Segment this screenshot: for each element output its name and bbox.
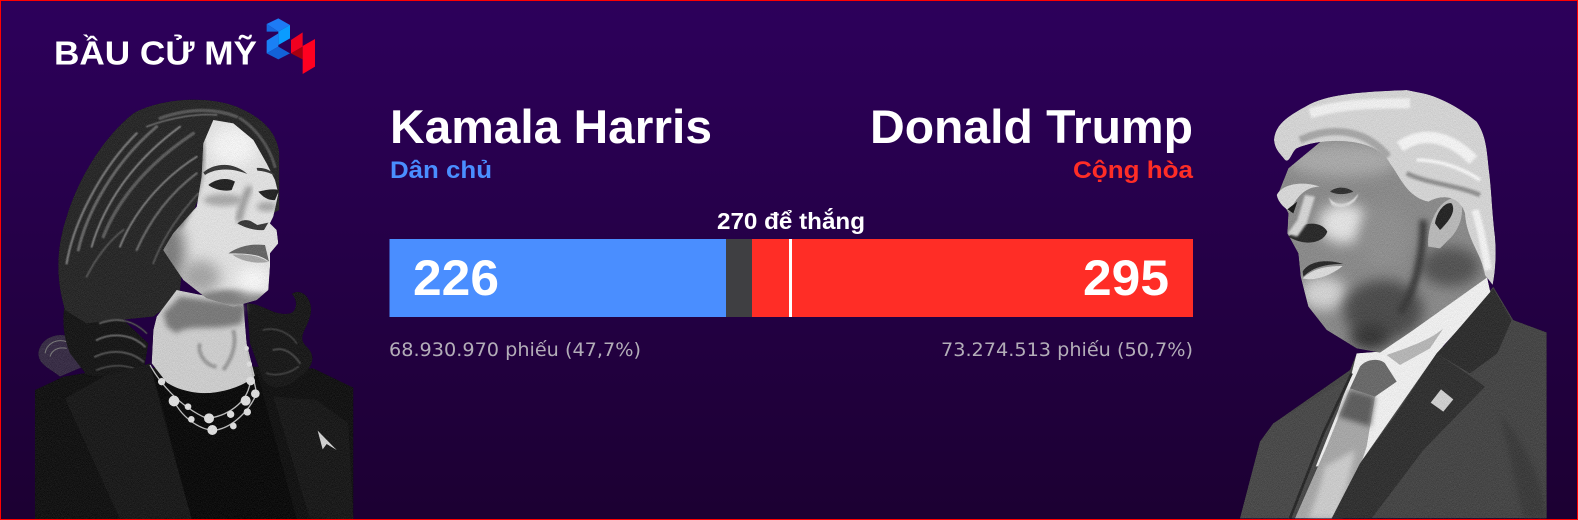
hair xyxy=(1274,90,1496,285)
number: 295: 295 xyxy=(1083,250,1169,306)
left curl xyxy=(38,335,83,377)
party: Cộng hòa: Cộng hòa xyxy=(1073,157,1194,184)
lips xyxy=(228,245,269,262)
logo: BẦU CỬ MỸ 24 xyxy=(54,18,315,74)
right lapel xyxy=(1332,353,1485,518)
candidate name: Donald Trump: Donald Trump xyxy=(870,100,1193,153)
left lapel xyxy=(1240,377,1350,518)
suit xyxy=(1240,287,1547,518)
popular vote: Trump: 73.274.513 phiếu (50,7%) xyxy=(941,339,1193,361)
nose xyxy=(237,220,268,230)
270 marker xyxy=(789,239,792,317)
tie xyxy=(1295,388,1375,518)
face xyxy=(1279,140,1487,352)
logo icon xyxy=(267,18,315,74)
logo text: BẦU CỬ MỸ xyxy=(54,34,257,72)
ear xyxy=(1428,198,1462,248)
eyes xyxy=(1287,202,1297,213)
necklace xyxy=(150,346,260,435)
hair shading xyxy=(1300,103,1488,270)
flag pin xyxy=(1431,389,1453,412)
popular vote: Harris: 68.930.970 phiếu (47,7%) xyxy=(389,339,641,361)
number: 226: 226 xyxy=(413,250,499,306)
neck xyxy=(152,290,255,393)
lapel pin xyxy=(318,431,337,450)
nose xyxy=(1288,224,1327,243)
bar: Harris xyxy=(390,239,726,317)
candidate name: Kamala Harris: Kamala Harris xyxy=(390,100,712,153)
eyes xyxy=(208,179,235,191)
electoral vote bar xyxy=(390,239,1193,317)
brows xyxy=(203,165,247,175)
label: 270 to win: 270 để thắng xyxy=(717,207,865,234)
right curl xyxy=(247,292,312,387)
portrait: Kamala Harris xyxy=(35,100,353,519)
black top xyxy=(150,363,297,519)
face xyxy=(164,120,278,306)
hair strands xyxy=(67,110,300,375)
tie knot xyxy=(1350,360,1397,397)
bar: Trump xyxy=(752,239,1193,317)
hair xyxy=(58,100,279,323)
brow xyxy=(1277,184,1320,212)
bar: undecided xyxy=(726,239,752,317)
party: Dân chủ: Dân chủ xyxy=(390,157,492,184)
mouth xyxy=(1303,261,1343,277)
shirt xyxy=(1313,275,1491,467)
portrait: Donald Trump xyxy=(1240,90,1547,518)
jacket xyxy=(35,367,353,519)
lapel xyxy=(65,363,192,519)
